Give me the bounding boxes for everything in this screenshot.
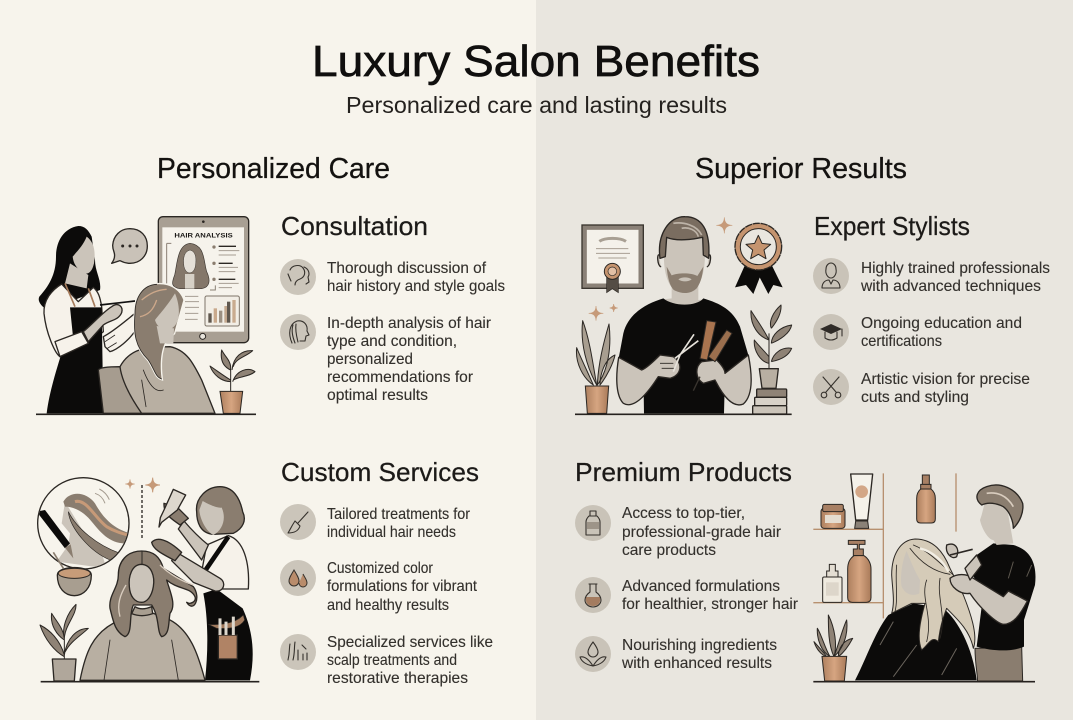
text: nourishing ingredients: Nourishing ingredients: [622, 637, 777, 654]
text: in-depth analysis: In-depth analysis of hair: [327, 315, 492, 332]
magnifier circle with colouring detail: [37, 478, 130, 569]
text: thorough discussion: Thorough discussion of: [327, 260, 487, 277]
list: premium products: professional-grade hair: [622, 524, 782, 541]
list: custom services: formulations for vibrant: [327, 578, 478, 595]
text: artistic vision: Artistic vision for precise: [861, 371, 1030, 388]
plant on books: [751, 305, 792, 414]
plant in copper pot: [576, 321, 615, 413]
list: custom services: and healthy results: [327, 597, 449, 614]
icon: flask: [575, 577, 611, 613]
list: premium products: [575, 505, 799, 672]
list: consultation: recommendations for: [327, 369, 474, 386]
list: premium products: care products: [622, 542, 716, 559]
client with wavy hair: [80, 551, 205, 680]
text: customized color: Customized color: [327, 560, 434, 577]
text: ongoing education: Ongoing education and: [861, 315, 1022, 332]
list: consultation: [280, 259, 505, 404]
woman with blonde hair in black cape: [855, 539, 977, 680]
potted plant: [210, 350, 255, 413]
list: custom services: scalp treatments and: [327, 652, 457, 669]
colour bowl: [53, 552, 91, 596]
list: expert stylists: cuts and styling: [861, 389, 969, 406]
tablet: HAIR ANALYSIS: [174, 233, 233, 240]
potted plant: [40, 604, 88, 681]
heading: Expert Stylists: Expert Stylists: [814, 211, 970, 241]
icon: graduation cap: [813, 314, 849, 350]
icon: bottle: [575, 505, 611, 541]
sparkles and dashed guide: [125, 478, 160, 539]
man in black t-shirt with tools: [617, 217, 751, 413]
list: custom services: [280, 504, 493, 687]
subtitle: Personalized care and lasting results: [346, 92, 727, 118]
text: highly trained: Highly trained professionals: [861, 260, 1050, 277]
heading: Custom Services: Custom Services: [281, 457, 479, 487]
icon: scalp treatment: [280, 634, 316, 670]
client in cape with long hair: [98, 284, 215, 413]
ground line: [813, 679, 1035, 684]
list: expert stylists: with advanced techniques: [860, 278, 1041, 295]
framed certificate: [582, 225, 643, 293]
panel: custom services illustration: [37, 478, 259, 682]
sparkles: [589, 217, 732, 321]
ground line: [36, 412, 256, 417]
icon: scissors: [813, 369, 849, 405]
ground line: [41, 679, 259, 684]
icon: colour drops: [280, 560, 316, 596]
list: consultation: type and condition,: [327, 333, 457, 350]
list: consultation: optimal results: [327, 387, 428, 404]
list: premium products: for healthier, stronger hair: [622, 596, 799, 613]
panel: premium products illustration: [813, 473, 1035, 682]
text: tailored treatments: Tailored treatments for: [327, 506, 471, 523]
list: custom services: individual hair needs: [327, 524, 456, 541]
tablet: [158, 217, 249, 343]
heading: Consultation: Consultation: [281, 211, 428, 241]
text: advanced formulations: Advanced formulations: [622, 578, 780, 595]
text: access to top-tier: Access to top-tier,: [622, 505, 745, 522]
ground line: [575, 412, 792, 417]
potted plant: [814, 615, 853, 681]
panel: consultation illustration: [36, 217, 256, 414]
icon: brush: [280, 504, 316, 540]
panel: expert stylist illustration: [575, 217, 792, 414]
icon: head with speech: [280, 259, 316, 295]
list: consultation: personalized: [327, 351, 413, 368]
icon: professional: [813, 258, 849, 294]
title: Luxury Salon Benefits: [312, 37, 760, 86]
list: expert stylists: certifications: [861, 333, 942, 350]
heading: Premium Products: Premium Products: [575, 457, 792, 487]
heading: Personalized Care: Personalized Care: [157, 153, 390, 185]
heading: Superior Results: Superior Results: [695, 153, 907, 185]
icon: drop and leaves: [575, 636, 611, 672]
award medal: [735, 223, 783, 294]
text: specialized services: Specialized services like: [327, 634, 493, 651]
speech bubble: [112, 229, 147, 263]
icon: hair profile: [280, 314, 316, 350]
shelves with products: [813, 473, 956, 618]
list: expert stylists: [813, 258, 1050, 406]
stylist with black hair and apron: [39, 226, 137, 413]
background: left panel: [0, 0, 536, 720]
background: right panel: [536, 0, 1073, 720]
man styling hair: [946, 485, 1035, 681]
list: consultation: hair history and style goals: [327, 278, 505, 295]
list: custom services: restorative therapies: [327, 670, 468, 687]
list: premium products: with enhanced results: [621, 655, 772, 672]
stylist pouring colour: [152, 487, 253, 680]
